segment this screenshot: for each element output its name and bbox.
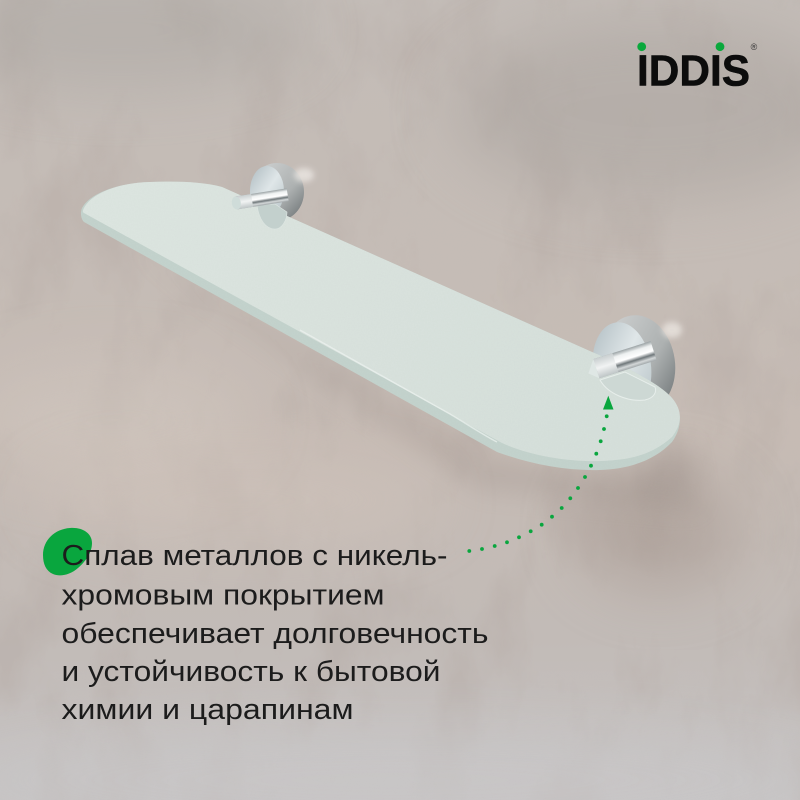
description text: хромовым покрытием [62, 580, 384, 612]
registered mark: ® [751, 42, 758, 52]
glass shelf [81, 182, 680, 470]
logo dot right [716, 42, 724, 51]
green blob accent [43, 528, 92, 575]
description text: обеспечивает долговечность [62, 618, 489, 650]
logo wordmark: IDDIS [637, 46, 750, 96]
rear wall mount [250, 163, 314, 221]
rear mount seen through glass [257, 204, 287, 229]
front mount seen through glass [600, 372, 656, 400]
description text: химии и царапинам [62, 694, 354, 726]
logo dot left [637, 42, 646, 51]
logo: IDDIS [637, 42, 758, 96]
front wall mount [587, 310, 682, 418]
rear mount pin [231, 188, 289, 210]
dotted arrow [467, 396, 614, 553]
front mount pin [585, 341, 657, 381]
description text: и устойчивость к бытовой [62, 656, 441, 688]
description text: Сплав металлов с никель- [62, 540, 448, 572]
